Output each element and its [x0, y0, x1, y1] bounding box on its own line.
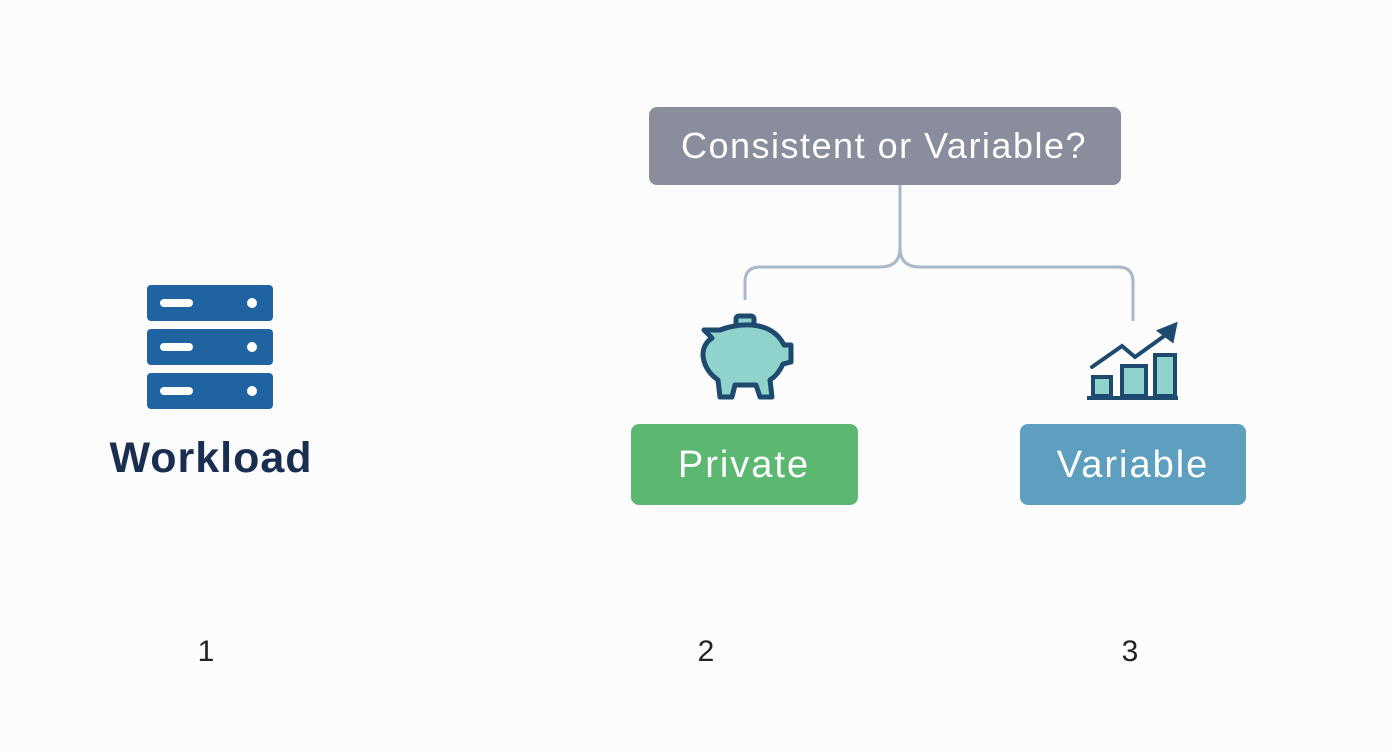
icon: growth chart [1087, 325, 1178, 398]
box: Private [631, 424, 858, 505]
question box: Consistent or Variable? [681, 125, 1087, 166]
number 2: 2 [698, 635, 714, 668]
connector [745, 185, 1133, 321]
heading: Workload: Workload [109, 434, 313, 482]
number 3: 3 [1122, 635, 1138, 668]
number 1: 1 [198, 635, 214, 668]
box: Variable [1020, 424, 1246, 505]
icon: piggy bank [703, 316, 791, 397]
box: Private: Private [678, 444, 810, 486]
question box [649, 107, 1121, 185]
icon: server [147, 285, 273, 409]
box: Variable: Variable [1057, 444, 1209, 486]
